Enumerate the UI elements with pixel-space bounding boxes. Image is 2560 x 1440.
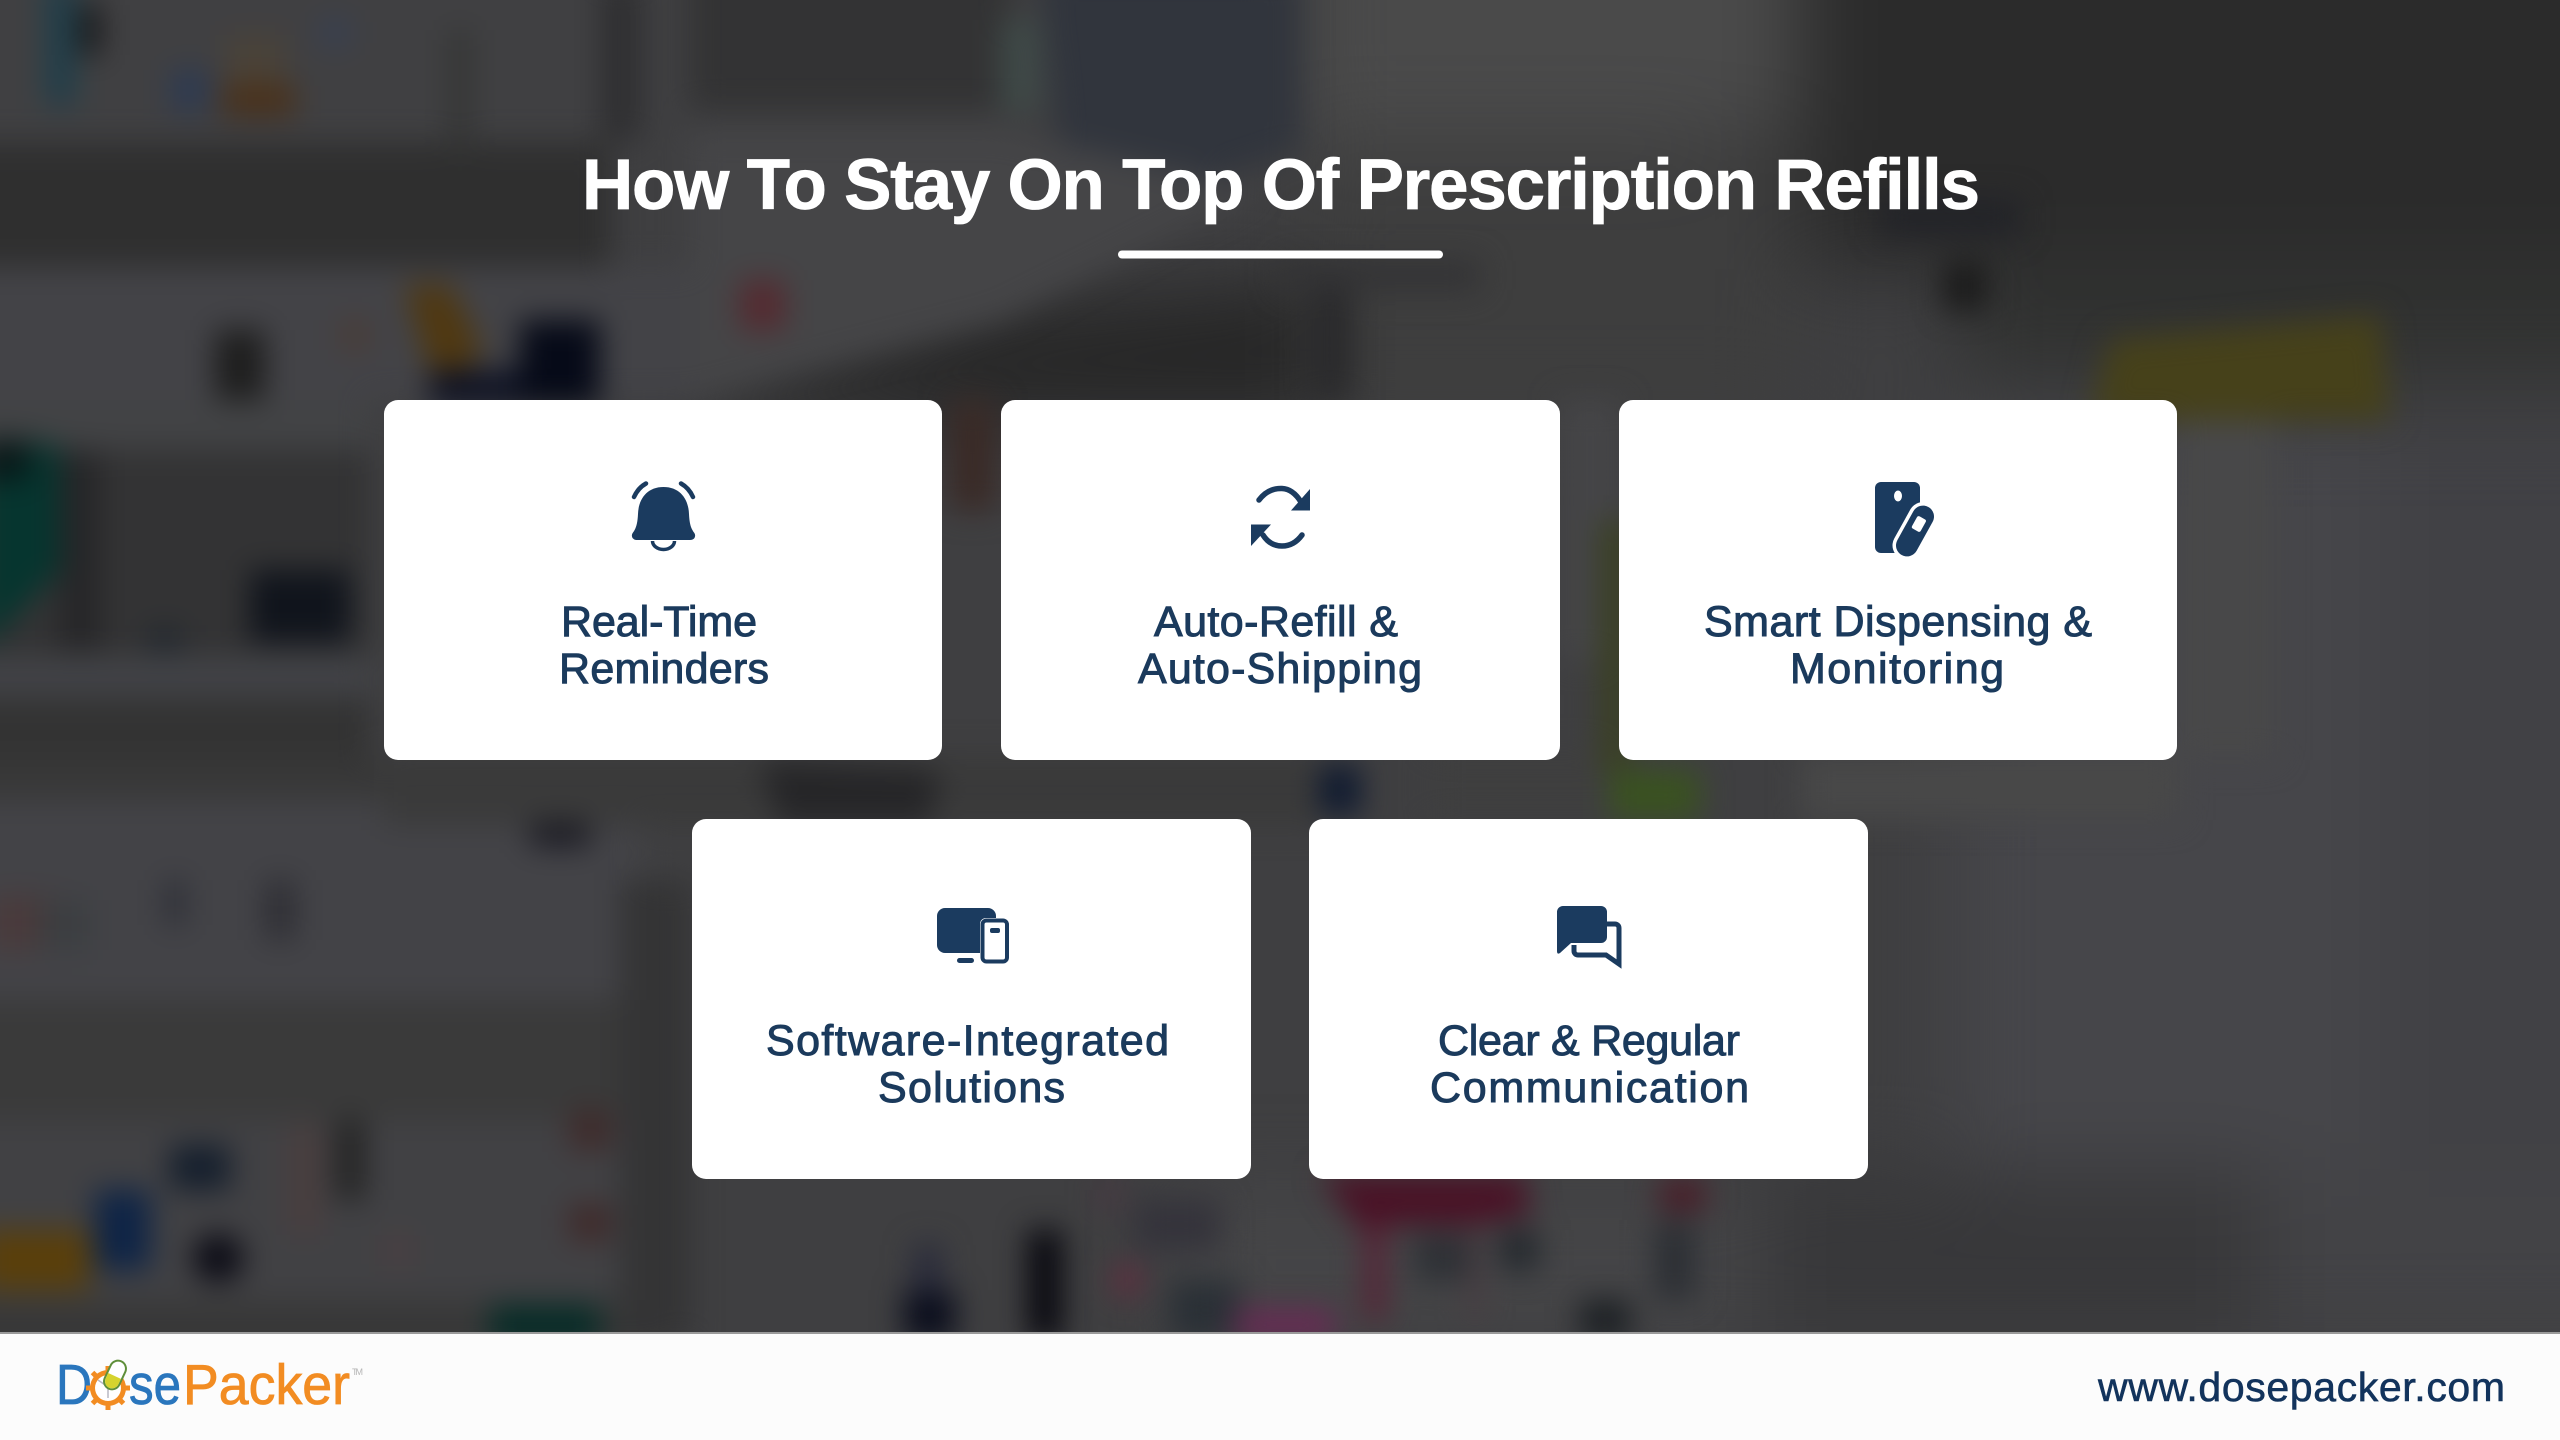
label: Real-Time Reminders: Real-Time [561,598,757,646]
label: Smart Dispensing & Monitoring: Monitoring [1790,645,2004,693]
bottom shelf [0,1230,90,1290]
card: Clear & Regular Communication [1309,819,1868,1179]
logo gear [86,1358,130,1410]
label: Real-Time Reminders [559,598,769,693]
logo: DosePacker: Packer [183,1353,350,1417]
centre dark, between rows [384,755,1324,825]
card: Auto-Refill & Auto-Shipping [1001,400,1560,760]
right details [2090,315,2390,420]
label: Smart Dispensing & Monitoring: Smart Dispensing & [1704,598,2092,646]
card: Real-Time Reminders [384,400,942,760]
card: Smart Dispensing & Monitoring [1619,400,2177,760]
label: Auto-Refill & Auto-Shipping: Auto-Shipping [1138,645,1422,693]
label: Clear & Regular Communication: Clear & Regular [1438,1017,1740,1065]
label: Clear & Regular Communication [1430,1017,1749,1112]
logo: DosePacker: TM [352,1367,363,1377]
label: Smart Dispensing & Monitoring [1704,598,2092,693]
label: Software-Integrated Solutions: Software-Integrated [766,1017,1169,1065]
icon: phone with pill [1875,482,1943,565]
label: Software-Integrated Solutions: Solutions [878,1064,1065,1112]
logo: DosePacker [56,1353,363,1417]
website url: www.dosepacker.com [2097,1364,2505,1410]
icon: bell [632,484,695,550]
title: How To Stay On Top Of Prescription Refills [582,146,1980,225]
colored bottles, top shelf [45,0,76,105]
logo: DosePacker: D [56,1353,92,1417]
label: Auto-Refill & Auto-Shipping [1138,598,1422,693]
icon: chat bubbles [1557,906,1619,964]
icon: monitor and phone [937,908,1009,964]
teal bin [0,440,60,650]
bottom centre [904,1290,955,1340]
left shelves [0,0,600,140]
title underline [1118,250,1443,258]
label: Auto-Refill & Auto-Shipping: Auto-Refill & [1154,598,1398,646]
second shelf [405,285,482,370]
label: Software-Integrated Solutions [766,1017,1169,1112]
icon: refresh arrows [1251,488,1310,546]
card: Software-Integrated Solutions [692,819,1251,1179]
label: Clear & Regular Communication: Communication [1430,1064,1749,1112]
top centre [690,0,1010,110]
third shelf [0,895,60,950]
logo: DosePacker: se [129,1353,181,1417]
footer bar [0,1332,2560,1440]
label: Real-Time Reminders: Reminders [559,645,769,693]
